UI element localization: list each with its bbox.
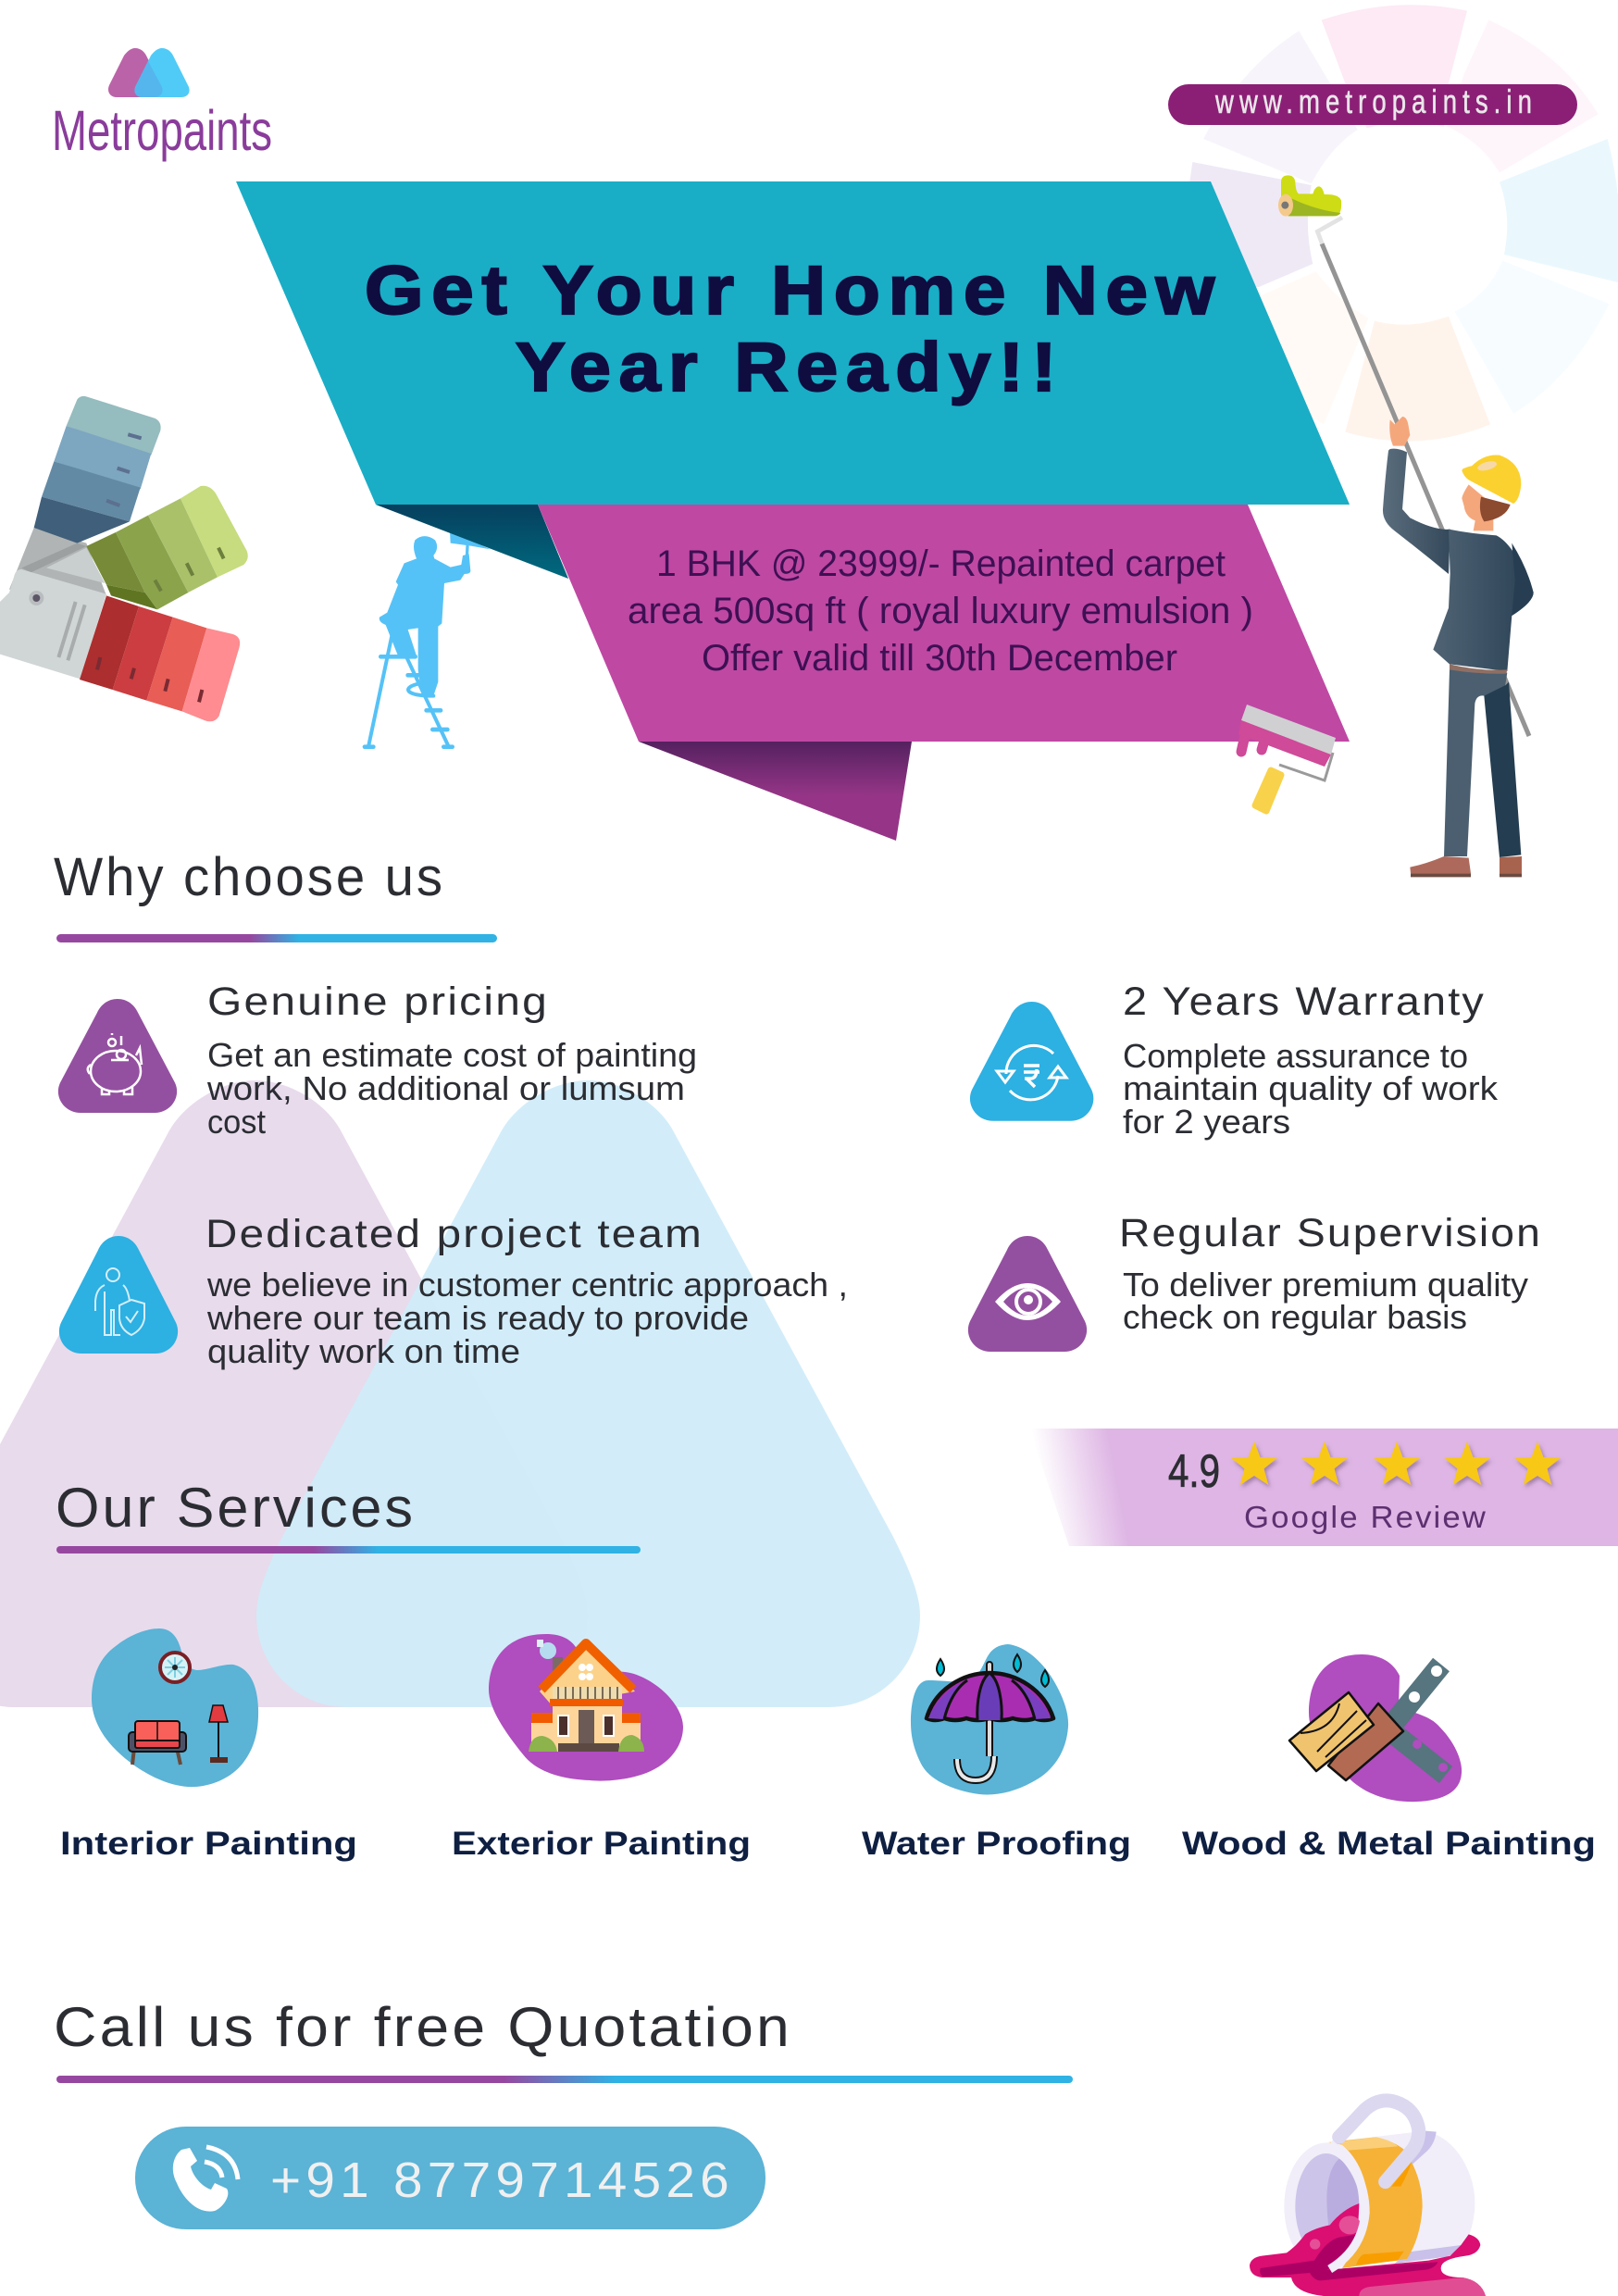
- roller head: [1278, 175, 1342, 243]
- feature: genuine pricing: [58, 980, 697, 1141]
- description: for 2 years: [1123, 1103, 1290, 1141]
- feature: 2 years warranty: [970, 980, 1499, 1141]
- icon: umbrella on blob: [911, 1644, 1068, 1794]
- headline: Get Your Home New: [365, 252, 1223, 329]
- label: Water Proofing: [862, 1826, 1131, 1862]
- background triangle: blue: [256, 1080, 920, 1707]
- label: Exterior Painting: [452, 1826, 751, 1862]
- stars: [1231, 1441, 1561, 1485]
- offer text: Offer valid till 30th December: [702, 638, 1177, 679]
- icon: painter with long roller: [1278, 175, 1534, 877]
- headline: Year Ready!!: [516, 329, 1064, 406]
- description: quality work on time: [207, 1332, 520, 1370]
- icon: eye: [968, 1236, 1087, 1352]
- description: Complete assurance to: [1123, 1037, 1468, 1075]
- underline: [56, 1546, 641, 1554]
- title: Dedicated project team: [205, 1212, 703, 1256]
- offer text: [628, 543, 1253, 679]
- underline: [56, 934, 497, 942]
- title: Regular Supervision: [1119, 1211, 1542, 1255]
- headline: [365, 252, 1223, 406]
- label: Interior Painting: [60, 1826, 357, 1862]
- description: where our team is ready to provide: [206, 1299, 749, 1337]
- feature: regular supervision: [968, 1211, 1542, 1352]
- service: wood and metal painting: [1182, 1654, 1596, 1862]
- headline banner: teal: [236, 181, 1350, 505]
- title: Genuine pricing: [207, 980, 549, 1024]
- offer banner: magenta: [538, 505, 1350, 742]
- icon: person with shield: [59, 1236, 178, 1354]
- description: maintain quality of work: [1123, 1069, 1499, 1107]
- icon: spilled paint bucket: [1250, 2101, 1486, 2296]
- icon: swatch fan: [0, 396, 248, 721]
- service: exterior painting: [452, 1634, 751, 1862]
- logo: [52, 48, 272, 162]
- logo mark: [108, 48, 190, 97]
- service: water proofing: [862, 1644, 1131, 1862]
- description: [206, 1266, 848, 1370]
- description: To deliver premium quality: [1123, 1266, 1528, 1304]
- icon: sofa, lamp, clock on blob: [92, 1628, 258, 1787]
- phone number: +91 8779714526: [270, 2152, 734, 2208]
- label: Wood & Metal Painting: [1182, 1826, 1596, 1862]
- rating number: 4.9: [1168, 1445, 1220, 1497]
- logo wordmark: Metropaints: [52, 99, 272, 162]
- title: 2 Years Warranty: [1123, 980, 1486, 1024]
- silhouette painter on ladder: [365, 530, 491, 747]
- feature: dedicated project team: [59, 1212, 848, 1370]
- icon: house on blob: [489, 1634, 683, 1781]
- description: [206, 1036, 697, 1141]
- description: check on regular basis: [1123, 1298, 1467, 1336]
- underline: [56, 2076, 1073, 2083]
- background triangle: purple: [0, 1080, 588, 1707]
- description: [1123, 1266, 1528, 1336]
- offer text: area 500sq ft ( royal luxury emulsion ): [628, 591, 1253, 631]
- icon: rupee cycle: [970, 1002, 1093, 1121]
- review label: Google Review: [1244, 1500, 1487, 1534]
- heading: our services: Our Services: [56, 1477, 416, 1539]
- icon: phone: [173, 2147, 238, 2212]
- icon: small paint roller: [1238, 705, 1336, 811]
- banner fold: teal: [376, 505, 568, 579]
- phone button: [135, 2127, 765, 2229]
- banner fold: purple: [639, 742, 912, 841]
- roller pole: [1322, 243, 1529, 736]
- icon: piggy bank: [58, 999, 177, 1113]
- description: Get an estimate cost of painting: [207, 1036, 697, 1074]
- background: colour wheel: [1185, 5, 1618, 442]
- heading: why choose us: Why choose us: [54, 847, 445, 907]
- description: cost: [207, 1103, 266, 1141]
- service: interior painting: [60, 1628, 357, 1862]
- description: work, No additional or lumsum: [206, 1069, 685, 1107]
- description: [1123, 1037, 1499, 1141]
- icon: wood and metal on blob: [1289, 1654, 1462, 1802]
- google review band: [1029, 1429, 1618, 1546]
- heading: call us: Call us for free Quotation: [54, 1996, 792, 2058]
- description: we believe in customer centric approach ,: [206, 1266, 848, 1304]
- painter figure: [1383, 417, 1534, 877]
- offer text: 1 BHK @ 23999/- Repainted carpet: [656, 543, 1226, 584]
